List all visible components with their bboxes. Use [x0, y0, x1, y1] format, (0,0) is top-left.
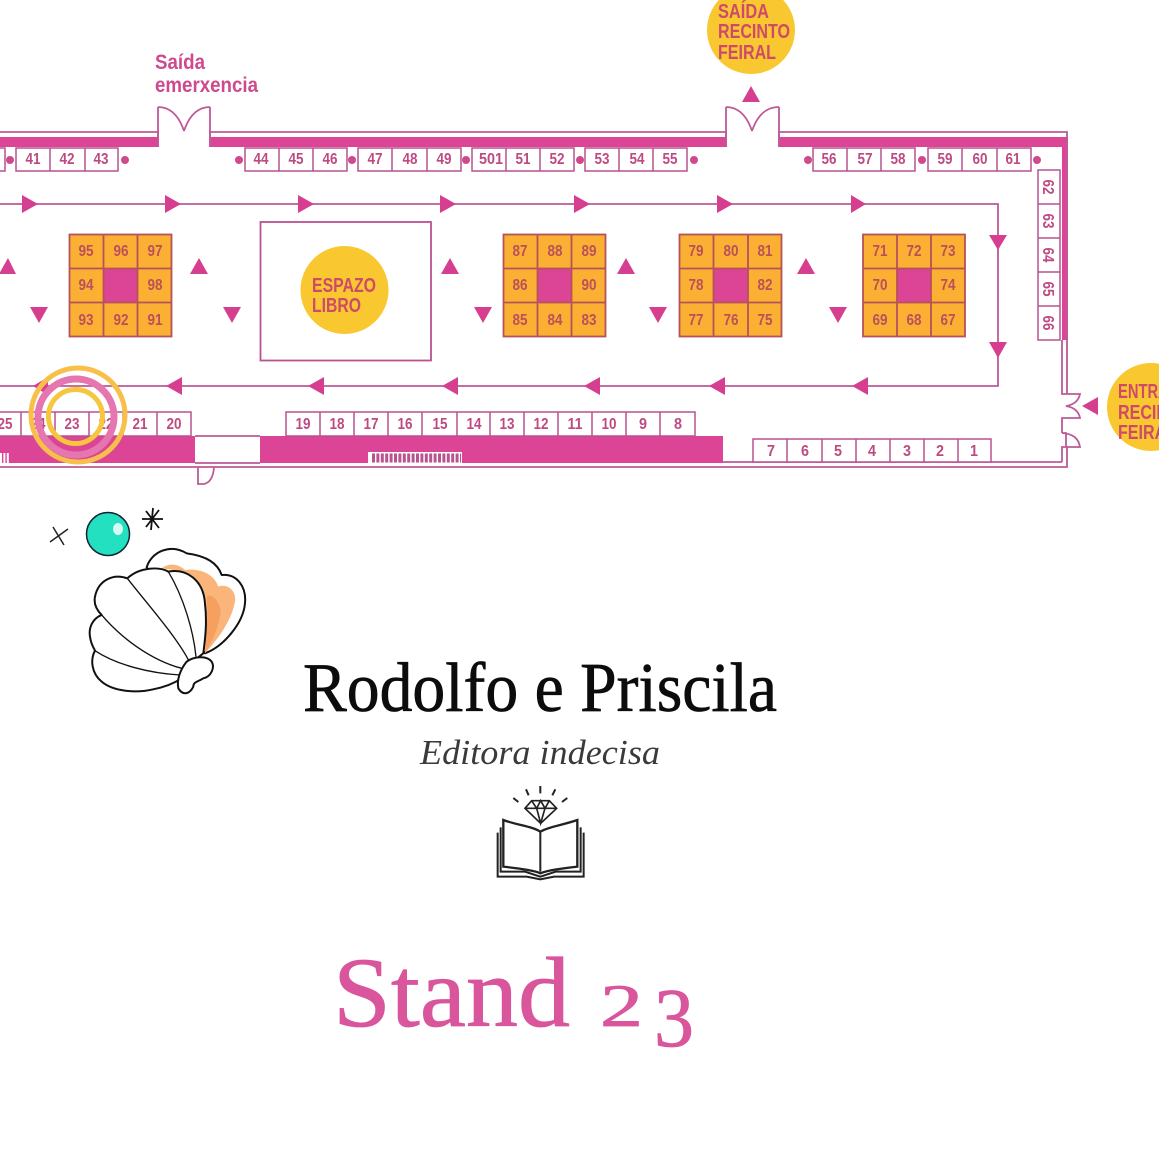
kiosk block 91-98: 97 [148, 243, 163, 260]
top stands row: 44 [254, 151, 269, 168]
kiosk block 83-90: 84 [548, 312, 563, 329]
subtitle: publisher tagline: Editora indecisa [419, 733, 660, 772]
bottom stands row 7-1: 4 [868, 443, 876, 460]
bottom stands row 19-8: 17 [364, 416, 379, 433]
bottom stands row 19-8: 18 [330, 416, 345, 433]
stand 23 target marker [31, 368, 125, 462]
bottom stands row 7-1: 6 [801, 443, 809, 460]
kiosk block 83-90: 89 [582, 243, 597, 260]
right stands column: 65 [1039, 282, 1056, 297]
kiosk block 67-74: 71 [872, 243, 888, 260]
callout: fair exit: RECINTO [718, 21, 790, 43]
top stands row [0, 148, 1041, 171]
arrow: to entrance [1082, 397, 1098, 415]
kiosk block 75-82: 76 [724, 312, 739, 329]
bottom stands row 25-20 [0, 412, 191, 436]
kiosk block 83-90: 87 [512, 243, 528, 260]
fair exit door [726, 107, 779, 147]
kiosk block 91-98: 94 [78, 277, 94, 294]
kiosk block 67-74: 74 [940, 277, 956, 294]
kiosk block 75-82: 78 [688, 277, 704, 294]
floor plan [0, 0, 1159, 484]
kiosk block 91-98: 98 [148, 277, 163, 294]
top stands row: 59 [938, 151, 953, 168]
heading: stand number: 3 [654, 972, 694, 1065]
top stands row: 42 [60, 151, 75, 168]
bottom stands row 25-20: 22 [98, 416, 114, 433]
top stands row: 58 [890, 151, 906, 168]
kiosk block 75-82: 75 [758, 312, 773, 329]
label: emergency exit [155, 51, 258, 97]
emergency exit door [158, 107, 210, 147]
top stands row: 46 [322, 151, 338, 168]
top stands row: 49 [436, 151, 452, 168]
kiosk block 83-90: 90 [582, 277, 597, 294]
bottom stands row 19-8: 14 [466, 416, 482, 433]
kiosk block 83-90: 86 [512, 277, 528, 294]
top stands row: 45 [288, 151, 304, 168]
title: publisher name: Rodolfo e Priscila [303, 650, 777, 727]
top stands row: 55 [662, 151, 678, 168]
top stands row: 41 [26, 151, 41, 168]
heading: stand number: Stand [333, 937, 570, 1048]
bottom stands row 25-20: 24 [30, 416, 46, 433]
panel: Espazo Libro: ESPAZO [312, 275, 376, 297]
circulation route arrows [0, 195, 1007, 395]
callout: fair entrance [1107, 363, 1159, 451]
icon: seashell [90, 549, 245, 693]
bottom stands row 7-1: 5 [834, 443, 842, 460]
right stands column: 62 [1039, 180, 1056, 195]
callout: fair exit [707, 0, 795, 74]
kiosk block 67-74: 68 [906, 312, 922, 329]
bottom stands row 7-1 [753, 439, 991, 462]
bottom stands row 19-8: 19 [296, 416, 311, 433]
kiosk block 67-74: 69 [872, 312, 888, 329]
bottom stands row 25-20: 23 [64, 416, 80, 433]
building walls [0, 132, 1080, 484]
kiosk block 91-98: 96 [114, 243, 129, 260]
bottom stands row 7-1: 2 [936, 443, 944, 460]
kiosk block 91-98: 92 [114, 312, 129, 329]
kiosk block 75-82: 77 [688, 312, 704, 329]
right stands column [1038, 170, 1060, 340]
callout: fair exit: FEIRAL [718, 42, 776, 64]
heading: stand number [333, 937, 694, 1065]
kiosk block 91-98: 95 [78, 243, 94, 260]
kiosk block 83-90: 85 [512, 312, 528, 329]
bottom stands row 19-8: 10 [602, 416, 617, 433]
callout: fair exit: SAÍDA [718, 0, 769, 23]
heading: stand number: 2 [600, 973, 643, 1039]
top stands row: 48 [402, 151, 418, 168]
bottom stands row 25-20: 20 [166, 416, 182, 433]
top stands row: 61 [1006, 151, 1021, 168]
bottom stands row 7-1: 3 [903, 443, 911, 460]
bottom stands row 7-1: 1 [970, 443, 978, 460]
panel: Espazo Libro [260, 222, 431, 360]
icon: pearl with sparkles [50, 508, 163, 556]
bottom stands row 19-8: 8 [674, 416, 682, 433]
top stands row: 57 [858, 151, 873, 168]
kiosk block 67-74 [863, 234, 965, 336]
top stands row: 501 [479, 151, 503, 168]
right stands column: 64 [1039, 248, 1056, 263]
kiosk block 75-82 [680, 234, 782, 336]
right stands column: 66 [1039, 316, 1056, 331]
kiosk block 75-82: 82 [758, 277, 773, 294]
top stands row: 51 [516, 151, 531, 168]
top stands row: 53 [594, 151, 610, 168]
bottom stands row 25-20: 21 [132, 416, 148, 433]
kiosk block 91-98: 93 [78, 312, 94, 329]
kiosk block 75-82: 79 [688, 243, 704, 260]
panel: Espazo Libro: LIBRO [312, 295, 361, 317]
kiosk block 91-98: 91 [148, 312, 163, 329]
kiosk block 91-98 [70, 234, 172, 336]
kiosk block 83-90: 83 [582, 312, 597, 329]
top stands row: 60 [972, 151, 988, 168]
kiosk block 75-82: 80 [724, 243, 739, 260]
right stands column: 63 [1039, 214, 1056, 229]
kiosk block 67-74: 73 [940, 243, 956, 260]
kiosk block 75-82: 81 [758, 243, 773, 260]
top stands row: 43 [94, 151, 109, 168]
top stands row: 56 [822, 151, 837, 168]
top stands row: 54 [630, 151, 645, 168]
bottom stands row 19-8: 13 [500, 416, 515, 433]
bottom stands row 7-1: 7 [767, 443, 775, 460]
bottom stands row 19-8 [286, 412, 695, 436]
top stands row: 52 [550, 151, 565, 168]
arrow: to fair exit [742, 86, 760, 102]
top stands row: 47 [368, 151, 383, 168]
kiosk block 67-74: 67 [940, 312, 956, 329]
bottom stands row 19-8: 15 [432, 416, 448, 433]
bottom stands row 19-8: 9 [639, 416, 647, 433]
bottom stands row 19-8: 11 [568, 416, 583, 433]
label: emergency exit: Saída [155, 51, 205, 74]
bottom stands row 19-8: 16 [398, 416, 413, 433]
kiosk block 83-90: 88 [548, 243, 563, 260]
kiosk block 67-74: 70 [872, 277, 888, 294]
label: emergency exit: emerxencia [155, 74, 258, 97]
bottom stands row 19-8: 12 [534, 416, 549, 433]
kiosk block 67-74: 72 [906, 243, 922, 260]
icon: open book with diamond [498, 786, 584, 879]
kiosk block 83-90 [504, 234, 606, 336]
